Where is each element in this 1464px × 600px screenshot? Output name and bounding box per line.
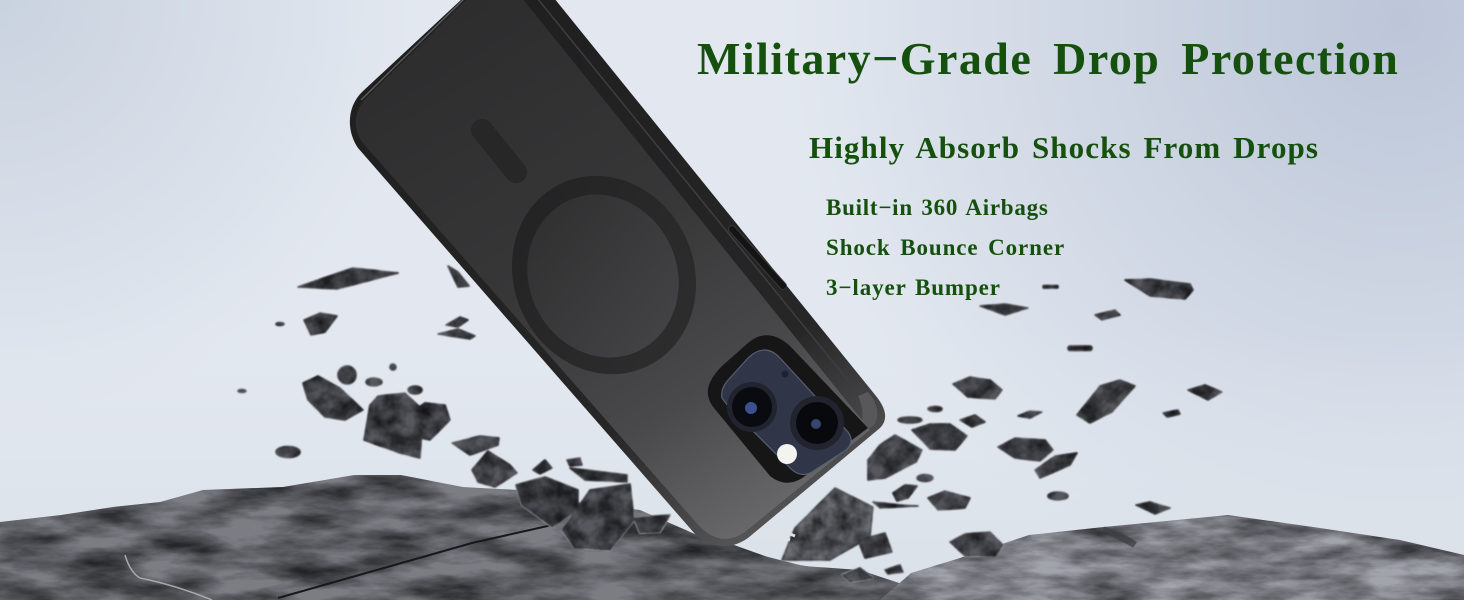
rim highlight left [361, 0, 465, 100]
feature: bumper: 3−layer Bumper [826, 275, 1001, 300]
feature: airbags: Built−in 360 Airbags [826, 195, 1049, 220]
microphone dot [782, 370, 788, 378]
rim highlight right [537, 0, 868, 405]
camera plate [722, 350, 851, 475]
case rim [350, 0, 885, 546]
magnet centre [501, 170, 705, 382]
rocky ground [0, 475, 1464, 600]
flash [777, 444, 797, 464]
flying rocks [238, 266, 1222, 582]
magnet ring [480, 145, 728, 405]
camera lens 2 [790, 396, 844, 450]
alignment pill [482, 130, 516, 172]
camera island [708, 335, 868, 483]
feature: corner: Shock Bounce Corner [826, 235, 1065, 260]
white rock streaks [765, 525, 795, 540]
back panel [356, 0, 870, 539]
phone case [350, 0, 885, 546]
subtitle: Highly Absorb Shocks From Drops [809, 130, 1319, 165]
camera lens 1 [727, 382, 777, 432]
rim corner shine [858, 392, 877, 436]
side button [732, 229, 783, 286]
title: Military−Grade Drop Protection [697, 33, 1399, 84]
